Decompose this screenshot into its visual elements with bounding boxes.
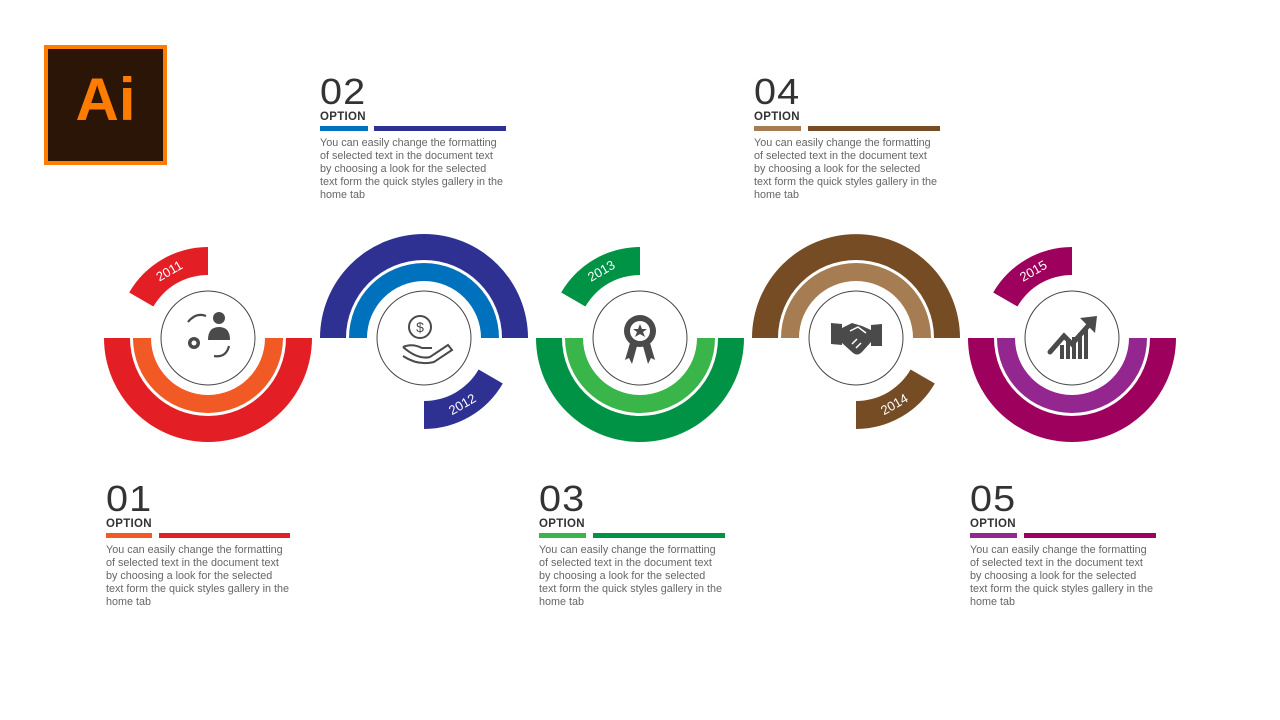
text block: option 04: text form the quick styles gallery in the [754, 176, 937, 188]
text block: option 05 [970, 478, 1156, 608]
icon: gear person cycle [188, 312, 230, 356]
text block: option 02 [320, 71, 506, 201]
icon: dollar in hand [403, 316, 452, 363]
logo: Adobe Illustrator [44, 45, 167, 165]
text block: option 03: 03 [539, 478, 585, 519]
step 5 rings: 2015 [1017, 257, 1050, 285]
step 1 rings [104, 247, 312, 442]
text block: option 03: OPTION [539, 518, 585, 530]
logo: Adobe Illustrator: Ai [76, 66, 136, 133]
text block: option 01: of selected text in the document text [106, 557, 279, 569]
step 4 rings [752, 234, 960, 429]
text block: option 05: home tab [970, 596, 1015, 608]
text block: option 04: home tab [754, 189, 799, 201]
step 1 rings: 2011 [153, 257, 185, 284]
step 2 rings: 2012 [446, 391, 479, 418]
text block: option 05: of selected text in the document text [970, 557, 1143, 569]
text block: option 03: of selected text in the document text [539, 557, 712, 569]
step 4 rings: 2014 [878, 391, 911, 418]
icon: dollar in hand: $ [416, 319, 424, 335]
text block: option 02: You can easily change the formatting [320, 137, 497, 149]
text block: option 05: by choosing a look for the selected [970, 570, 1136, 582]
text block: option 02: by choosing a look for the selected [320, 163, 486, 175]
icon: growth chart [1050, 316, 1097, 359]
text block: option 02: OPTION [320, 111, 366, 123]
text block: option 02: 02 [320, 71, 366, 112]
text block: option 04: OPTION [754, 111, 800, 123]
step 2 rings [320, 234, 528, 429]
step 5 rings [968, 247, 1176, 442]
text block: option 03: by choosing a look for the selected [539, 570, 705, 582]
text block: option 01 [106, 478, 290, 608]
text block: option 01: by choosing a look for the selected [106, 570, 272, 582]
text block: option 01: text form the quick styles gallery in the [106, 583, 289, 595]
text block: option 04: 04 [754, 71, 800, 112]
text block: option 03: You can easily change the formatting [539, 544, 716, 556]
text block: option 04: of selected text in the document text [754, 150, 927, 162]
text block: option 04: You can easily change the formatting [754, 137, 931, 149]
text block: option 05: 05 [970, 478, 1016, 519]
text block: option 03: text form the quick styles gallery in the [539, 583, 722, 595]
text block: option 05: text form the quick styles gallery in the [970, 583, 1153, 595]
text block: option 01: home tab [106, 596, 151, 608]
text block: option 05: OPTION [970, 518, 1016, 530]
text block: option 05: You can easily change the formatting [970, 544, 1147, 556]
text block: option 01: OPTION [106, 518, 152, 530]
text block: option 02: text form the quick styles gallery in the [320, 176, 503, 188]
text block: option 01: You can easily change the formatting [106, 544, 283, 556]
icon: award badge [624, 315, 656, 364]
text block: option 02: home tab [320, 189, 365, 201]
text block: option 04 [754, 71, 940, 201]
text block: option 04: by choosing a look for the selected [754, 163, 920, 175]
step 3 rings [536, 247, 744, 442]
text block: option 02: of selected text in the document text [320, 150, 493, 162]
text block: option 03 [539, 478, 725, 608]
text block: option 03: home tab [539, 596, 584, 608]
text block: option 01: 01 [106, 478, 152, 519]
step 3 rings: 2013 [585, 257, 618, 285]
icon: handshake [831, 323, 882, 354]
